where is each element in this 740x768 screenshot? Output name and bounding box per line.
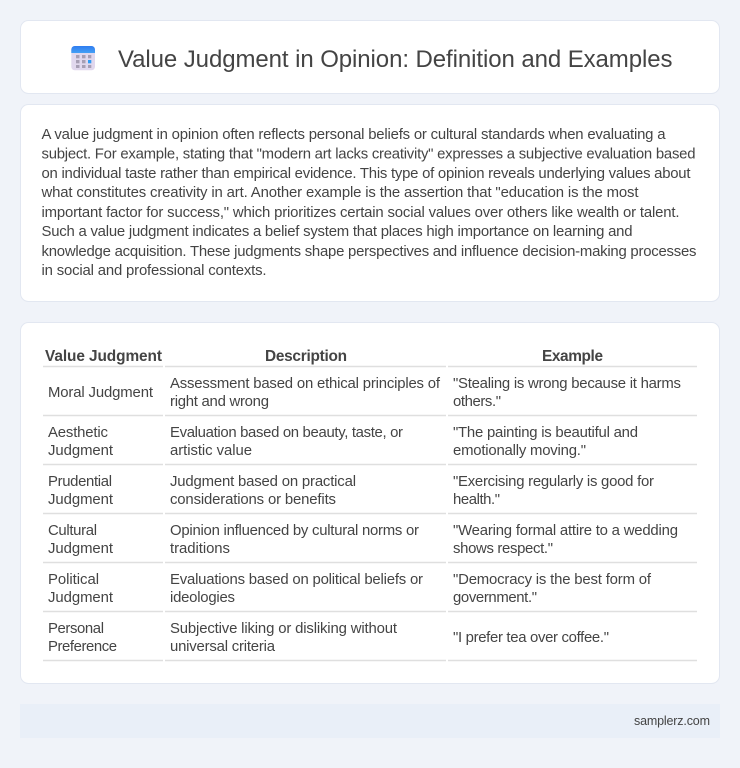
row: cultural judgment: shows respect." <box>453 541 553 557</box>
row: prudential judgment: Judgment based on practical <box>170 474 356 490</box>
panel: value judgment table <box>20 322 720 684</box>
row: aesthetic judgment: Judgment <box>48 443 114 459</box>
row: cultural judgment: traditions <box>170 541 230 557</box>
row: personal preference: Preference <box>48 639 117 655</box>
row: aesthetic judgment: Evaluation based on beauty, taste, or <box>170 425 403 441</box>
row: political judgment: Evaluations based on political beliefs or <box>170 572 423 588</box>
row: prudential judgment: considerations or benefits <box>170 492 336 508</box>
table header: Value Judgment <box>45 348 162 365</box>
table header: Description <box>265 348 347 365</box>
row: aesthetic judgment: Aesthetic <box>48 425 109 441</box>
row: prudential judgment: health." <box>453 492 500 508</box>
row: political judgment: Political <box>48 572 99 588</box>
row: political judgment: ideologies <box>170 590 235 606</box>
row: cultural judgment <box>43 523 697 562</box>
row: prudential judgment <box>43 474 697 514</box>
row: personal preference <box>43 621 697 660</box>
row: personal preference: Subjective liking or disliking without <box>170 621 398 637</box>
row: political judgment: "Democracy is the best form of <box>453 572 652 588</box>
icon: calendar <box>71 46 95 70</box>
row: cultural judgment: Judgment <box>48 541 114 557</box>
panel: title card <box>20 20 720 94</box>
panel: introduction paragraph: on individual taste rather than empirical evidence. This type of opinion reveals underlying values about <box>42 166 691 182</box>
panel: introduction paragraph: important factor for success," which prioritizes certain social values over others like wealth or talent. <box>42 205 680 221</box>
row: aesthetic judgment: emotionally moving." <box>453 443 586 459</box>
row: prudential judgment: Judgment <box>48 492 114 508</box>
panel: introduction paragraph: Such a value judgment indicates a belief system that places high importance on learning and <box>42 224 632 240</box>
panel: introduction paragraph: what constitutes creativity in art. Another example is the assertion that "education is the most <box>40 185 639 201</box>
row: personal preference: universal criteria <box>170 639 276 655</box>
row: aesthetic judgment: artistic value <box>170 443 252 459</box>
row: political judgment: Judgment <box>48 590 114 606</box>
row: moral judgment: "Stealing is wrong because it harms <box>453 376 681 392</box>
row: moral judgment <box>43 376 697 416</box>
row: aesthetic judgment: "The painting is beautiful and <box>453 425 638 441</box>
row: political judgment: government." <box>453 590 537 606</box>
footer <box>20 704 720 738</box>
row: cultural judgment: Opinion influenced by cultural norms or <box>170 523 419 539</box>
row: political judgment <box>43 572 697 612</box>
row: moral judgment: Assessment based on ethical principles of <box>170 376 441 392</box>
panel: introduction paragraph: A value judgment in opinion often reflects personal beliefs or cultural standards when evaluating a <box>42 127 666 143</box>
row: aesthetic judgment <box>43 425 697 464</box>
row: cultural judgment: "Wearing formal attire to a wedding <box>453 523 678 539</box>
panel: introduction paragraph: subject. For example, stating that "modern art lacks creativity" expresses a subjective evaluation based <box>42 146 696 162</box>
row: prudential judgment: "Exercising regularly is good for <box>453 474 654 490</box>
row: cultural judgment: Cultural <box>48 523 97 539</box>
row: moral judgment: others." <box>453 394 501 410</box>
table header <box>43 348 697 366</box>
row: prudential judgment: Prudential <box>48 474 112 490</box>
row: personal preference: Personal <box>48 621 104 637</box>
panel: introduction paragraph: in social and professional contexts. <box>42 263 266 279</box>
row: personal preference: "I prefer tea over coffee." <box>453 630 609 646</box>
table header: Example <box>542 348 603 365</box>
panel: introduction paragraph <box>20 104 720 302</box>
row: moral judgment: right and wrong <box>170 394 269 410</box>
row: moral judgment: Moral Judgment <box>48 385 154 401</box>
panel: introduction paragraph: knowledge acquisition. These judgments shape perspectives and influence decision-making processes <box>42 244 696 260</box>
title: Value Judgment in Opinion: Definition and Examples <box>118 46 672 73</box>
footer: samplerz.com <box>634 714 710 728</box>
